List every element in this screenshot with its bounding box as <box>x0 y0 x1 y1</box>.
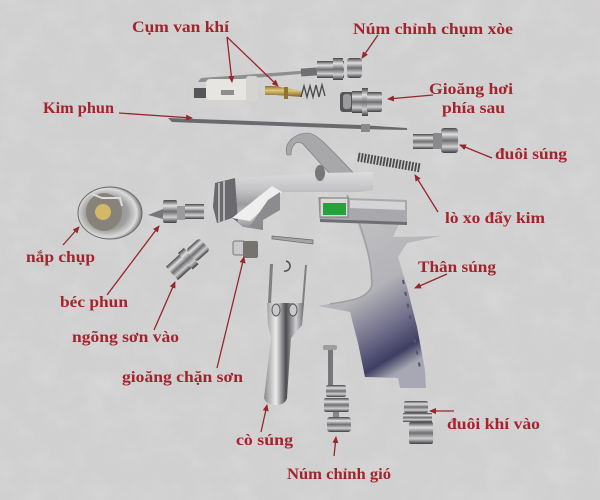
label: béc phun <box>60 226 159 311</box>
part: retaining clip <box>284 261 290 271</box>
part: needle spring <box>358 157 421 168</box>
label: Núm chỉnh gió <box>287 437 391 483</box>
label: Cụm van khí: Cụm van khí <box>132 19 230 36</box>
part: rear air seal <box>340 88 382 116</box>
label: Núm chỉnh chụm xòe <box>353 21 513 58</box>
label: béc phun: béc phun <box>60 294 128 311</box>
part: air adjustment knob <box>323 345 351 432</box>
part: air inlet fitting <box>403 401 433 444</box>
label: Cụm van khí <box>132 19 278 86</box>
label: Thân súng <box>415 259 496 288</box>
label: đuôi khí vào: đuôi khí vào <box>447 416 540 433</box>
part: spray nozzle <box>148 200 204 223</box>
label: Núm chỉnh gió: Núm chỉnh gió <box>287 466 391 483</box>
part: paint seal <box>233 241 258 258</box>
label: cò súng <box>236 405 293 449</box>
label: đuôi súng: đuôi súng <box>495 146 567 163</box>
part: gun body upper with hook <box>213 133 407 230</box>
label: Núm chỉnh chụm xòe: Núm chỉnh chụm xòe <box>353 21 513 38</box>
label: cò súng: cò súng <box>236 432 293 449</box>
label: lò xo đẩy kim: lò xo đẩy kim <box>445 210 545 227</box>
part: air valve needle and fan adjustment knob <box>198 58 362 82</box>
part: gun tail <box>413 128 458 153</box>
part: trigger pin <box>272 236 313 244</box>
label: gioăng chặn sơn <box>122 257 244 386</box>
part: green level window <box>320 198 348 217</box>
label: ngõng sơn vào: ngõng sơn vào <box>72 329 179 346</box>
label: nắp chụp: nắp chụp <box>26 249 95 266</box>
label: ngõng sơn vào <box>72 282 179 346</box>
label: Gioăng hơi phía sau <box>388 81 514 117</box>
part: gun handle <box>318 195 441 388</box>
label: đuôi súng <box>460 145 567 163</box>
label: gioăng chặn sơn: gioăng chặn sơn <box>122 369 243 386</box>
label: Gioăng hơi phía sau: phía sau <box>442 100 505 117</box>
part: paint inlet fitting <box>165 236 212 282</box>
label: Kim phun <box>43 100 192 118</box>
part: brass valve stem with spring <box>265 85 325 99</box>
label: lò xo đẩy kim <box>415 175 545 227</box>
part: fluid cap <box>78 187 142 239</box>
part: needle <box>168 118 407 132</box>
label: Kim phun: Kim phun <box>43 100 114 117</box>
label: đuôi khí vào <box>430 411 540 433</box>
label: Thân súng: Thân súng <box>418 259 496 276</box>
part: air valve white cylinder <box>194 76 258 101</box>
label: nắp chụp <box>26 227 95 266</box>
label: Gioăng hơi phía sau: Gioăng hơi <box>429 81 514 98</box>
part: trigger <box>264 264 307 405</box>
